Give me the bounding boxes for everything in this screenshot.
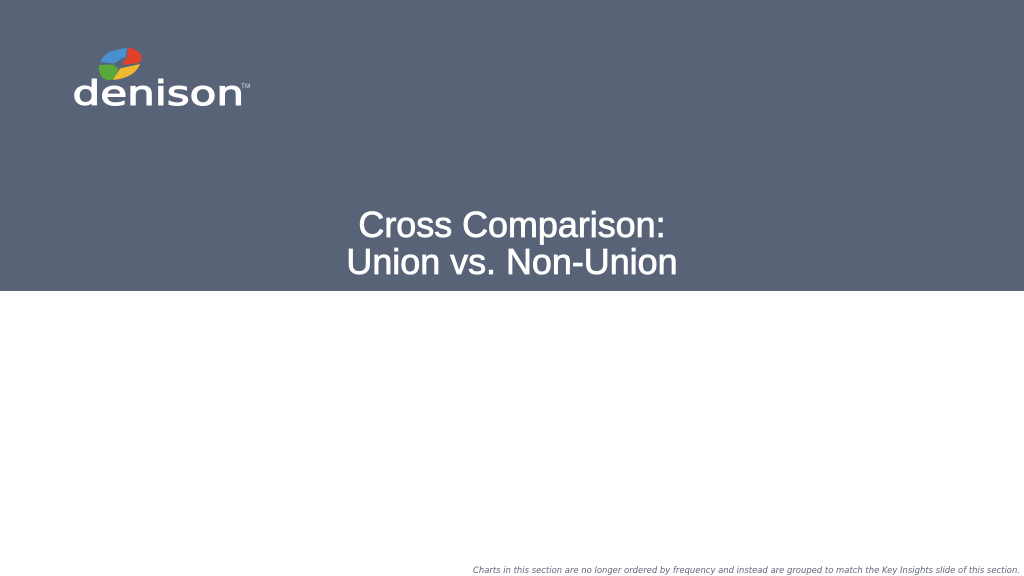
logo segment: yellow [113,64,140,80]
logo segment: blue [100,48,127,64]
footnote: Charts in this section are no longer ordered by frequency and instead are grouped to match the Key Insights slide of this section. [473,565,1020,575]
title: Union vs. Non-Union [346,242,678,282]
logo wordmark: denison [72,74,244,114]
icon: denison logo [72,48,250,114]
title: Cross Comparison: [358,204,666,244]
trademark: TM [241,83,250,90]
header band [0,0,1024,291]
logo segment: red [123,48,142,65]
logo segment: green [99,64,118,80]
title [346,204,678,282]
